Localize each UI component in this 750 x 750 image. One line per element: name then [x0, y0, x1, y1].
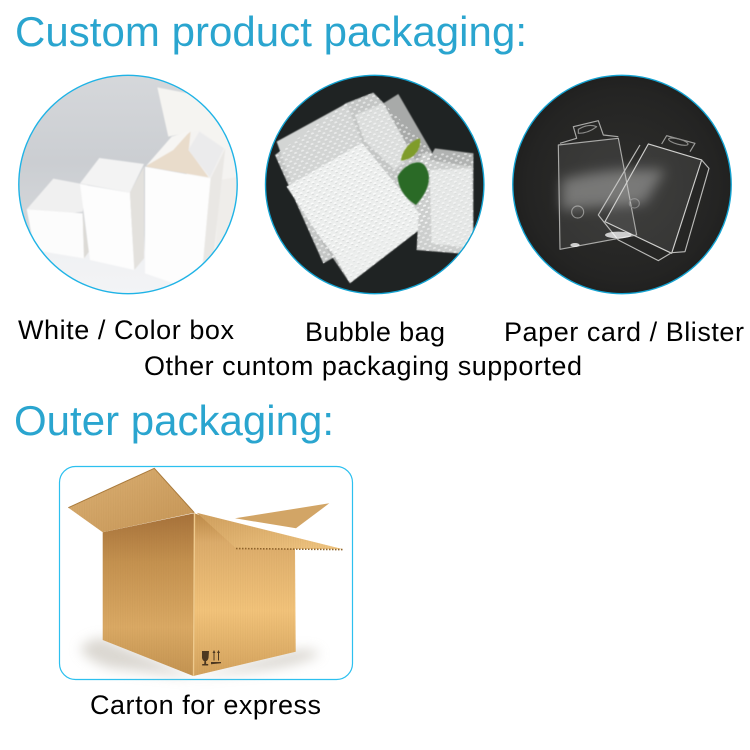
small box [27, 179, 87, 215]
heading: outer packaging: Outer packaging: [14, 397, 334, 444]
right background, back flap of tall box [187, 96, 236, 247]
panel: carton image [60, 466, 352, 680]
photo circle: paper card and blister [510, 72, 736, 298]
left blister [558, 138, 637, 249]
caption: paper card / blister: Paper card / Blister [504, 317, 744, 347]
left flap [68, 468, 194, 532]
fragile and this-way-up marks [202, 650, 221, 666]
back right flap [235, 503, 329, 528]
left face [103, 513, 194, 676]
caption: white / color box: White / Color box [18, 315, 234, 345]
title: custom product packaging: Custom product packaging: [15, 8, 527, 55]
right face [193, 513, 296, 676]
photo circle: white and color boxes [15, 72, 241, 298]
leaf [398, 138, 429, 205]
shadow [80, 638, 320, 677]
caption: bubble bag: Bubble bag [305, 317, 445, 347]
photo circle: bubble bags [262, 72, 488, 298]
medium box [80, 158, 144, 193]
right blister [605, 144, 702, 253]
tall box [145, 167, 211, 283]
caption: carton for express: Carton for express [90, 690, 321, 720]
caption: other custom packaging supported: Other cuntom packaging supported [144, 351, 582, 381]
front right flap [197, 513, 343, 549]
